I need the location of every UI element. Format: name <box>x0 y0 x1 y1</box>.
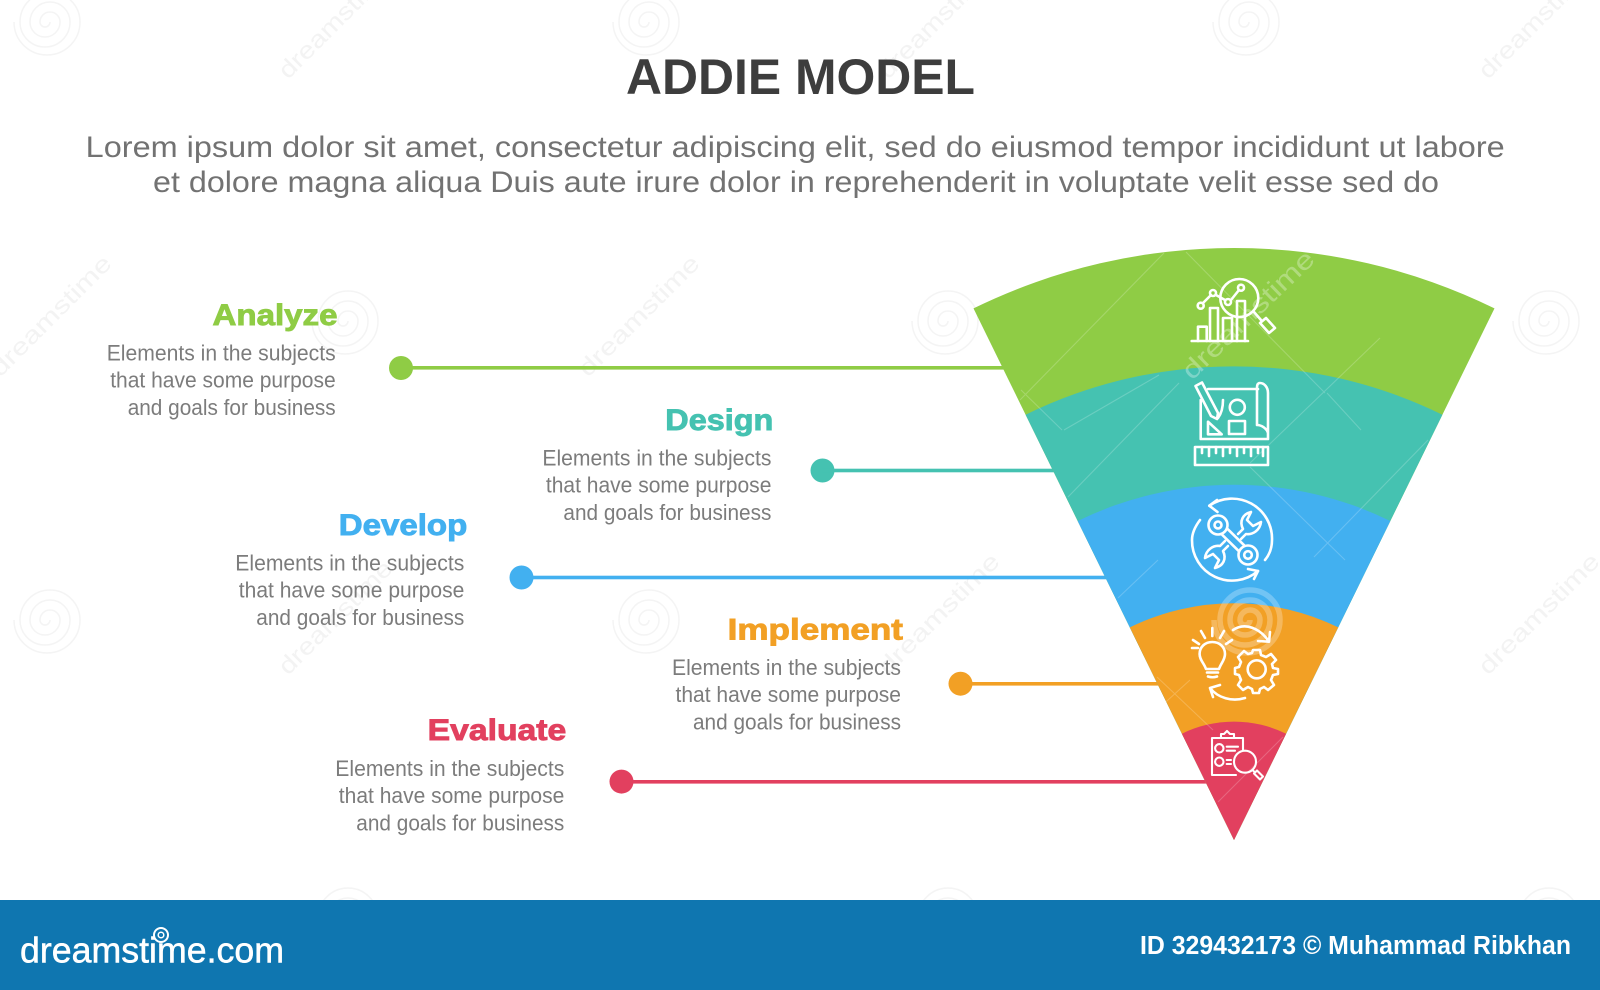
text: implement description: that have some purpose <box>676 682 901 707</box>
connector: design <box>810 458 1062 482</box>
text: evaluate description: Elements in the subjects <box>335 756 564 781</box>
funnel chart <box>974 248 1494 840</box>
segment: design <box>1026 366 1442 840</box>
footer credit: ID 329432173 © Muhammad Ribkhan <box>1140 932 1571 960</box>
segment: evaluate <box>1182 722 1286 840</box>
text: develop description: and goals for business <box>256 605 464 630</box>
connector: develop <box>510 566 1116 590</box>
subtitle text block: et dolore magna aliqua Duis aute irure dolor in reprehenderit in voluptate velit esse sed do <box>153 166 1439 199</box>
icon: analysis chart with magnifier <box>1192 279 1275 341</box>
connector: analyze <box>389 356 1011 380</box>
text: analyze description <box>107 341 336 420</box>
watermark over funnel <box>1020 244 1428 802</box>
watermark background: dreamstime <box>873 548 1005 680</box>
footer logo: dreamstime.com <box>20 930 284 971</box>
heading: analyze: Analyze <box>212 299 338 332</box>
text: analyze description: Elements in the subjects <box>107 341 336 366</box>
text: implement description: and goals for business <box>693 709 901 734</box>
watermark background: dreamstime <box>573 250 705 382</box>
title: ADDIE MODEL <box>626 48 975 105</box>
text: design description: and goals for business <box>563 500 771 525</box>
label block: implement <box>672 614 903 734</box>
text: develop description: that have some purpose <box>239 578 464 603</box>
watermark over funnel: dreamstime <box>1175 244 1321 385</box>
subtitle text block: Lorem ipsum dolor sit amet, consectetur adipiscing elit, sed do eiusmod tempor incididunt ut labore <box>86 131 1505 164</box>
label block: design <box>542 404 773 525</box>
heading: develop: Develop <box>339 509 467 542</box>
segment: develop <box>1078 485 1390 840</box>
footer bar <box>0 900 1600 990</box>
text: implement description <box>672 655 901 734</box>
heading: design: Design <box>665 404 773 437</box>
text: design description: Elements in the subjects <box>542 446 771 471</box>
icon: wrenches in cycle <box>1192 499 1272 581</box>
segment: implement <box>1130 603 1338 840</box>
text: evaluate description: and goals for business <box>356 810 564 835</box>
connector: evaluate <box>610 770 1214 794</box>
text: analyze description: that have some purpose <box>110 368 336 393</box>
watermark background: dreamstime <box>273 555 398 680</box>
text: develop description <box>235 551 464 630</box>
text: design description <box>542 446 771 525</box>
label block: analyze <box>107 299 338 420</box>
watermark background: dreamstime <box>1473 548 1600 680</box>
icon: idea and gear cycle <box>1192 626 1278 700</box>
text: evaluate description: that have some purpose <box>339 783 564 808</box>
text: evaluate description <box>335 756 564 835</box>
subtitle text block <box>86 131 1505 199</box>
text: implement description: Elements in the subjects <box>672 655 901 680</box>
icon: evaluation clipboard with magnifier <box>1212 731 1263 780</box>
heading: evaluate: Evaluate <box>428 714 566 747</box>
text: develop description: Elements in the subjects <box>235 551 464 576</box>
heading: implement: Implement <box>728 614 903 646</box>
segment: analyze <box>974 248 1494 840</box>
label block: evaluate <box>335 714 566 835</box>
connector: implement <box>948 672 1168 696</box>
text: analyze description: and goals for business <box>128 395 336 420</box>
text: design description: that have some purpose <box>546 473 771 498</box>
label block: develop <box>235 509 467 630</box>
icon: blueprint design <box>1195 382 1268 465</box>
